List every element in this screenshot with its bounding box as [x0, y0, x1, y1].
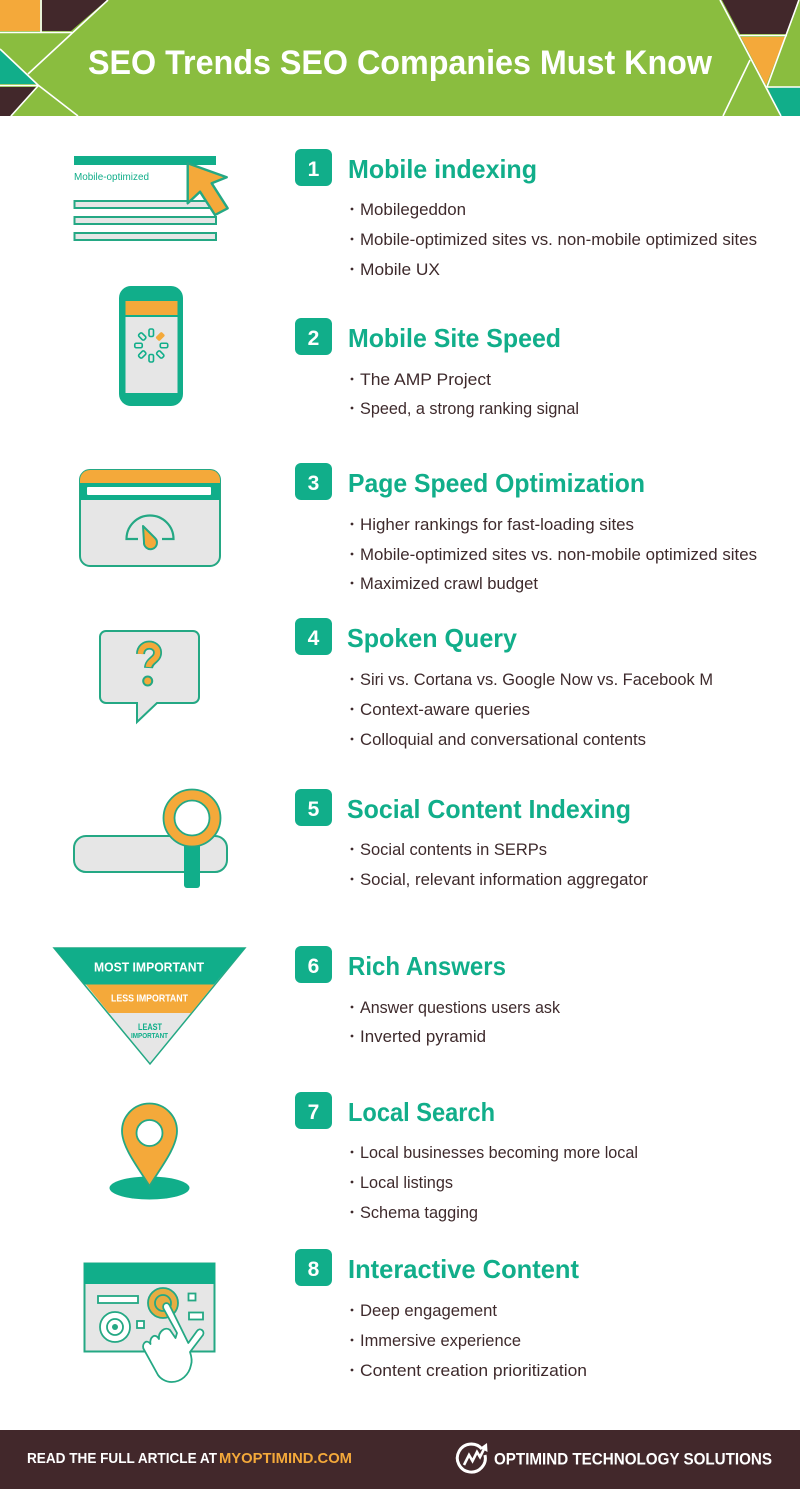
item 8: Interactive Content: Interactive Content: [348, 1254, 579, 1284]
item 8: Interactive Content: Content creation prioritization: [360, 1361, 587, 1380]
item 5: Social Content Indexing: Social contents in SERPs: [360, 840, 547, 859]
item 6: Rich Answers: [295, 946, 560, 1046]
item 7: Local Search: Local Search: [348, 1097, 495, 1127]
footer call to action: READ THE FULL ARTICLE AT: [27, 1450, 217, 1467]
item 6: Rich Answers: Inverted pyramid: [360, 1027, 486, 1046]
item 3: Page Speed Optimization: Mobile-optimized sites vs. non-mobile optimized sites: [360, 545, 757, 564]
footer link: MYOPTIMIND.COM: [219, 1450, 352, 1467]
icon: speech bubble with question mark: [100, 631, 199, 722]
icon: inverted pyramid: LESS IMPORTANT: [111, 994, 188, 1004]
icon: inverted pyramid: IMPORTANT: [131, 1033, 169, 1040]
item 4: Spoken Query: Siri vs. Cortana vs. Google Now vs. Facebook M: [360, 670, 713, 689]
icon: browser window with speed gauge: [80, 470, 220, 566]
item 8: Interactive Content: Deep engagement: [360, 1301, 497, 1320]
item 3: Page Speed Optimization: 3: [308, 472, 319, 495]
icon: location pin: [110, 1104, 190, 1200]
item 3: Page Speed Optimization: Maximized crawl budget: [360, 574, 538, 593]
item 7: Local Search: Schema tagging: [360, 1203, 478, 1222]
item 5: Social Content Indexing: [295, 789, 648, 889]
item 8: Interactive Content: [295, 1249, 587, 1380]
item 5: Social Content Indexing: Social, relevant information aggregator: [360, 870, 648, 889]
item 8: Interactive Content: 8: [308, 1258, 320, 1281]
icon: search bar with magnifying glass: [74, 790, 227, 888]
item 1: Mobile indexing: Mobilegeddon: [360, 200, 466, 219]
item 2: Mobile Site Speed: Mobile Site Speed: [348, 323, 561, 353]
item 6: Rich Answers: Rich Answers: [348, 951, 506, 981]
item 8: Interactive Content: Immersive experience: [360, 1331, 521, 1350]
item 3: Page Speed Optimization: Page Speed Optimization: [348, 468, 645, 498]
item 4: Spoken Query: [295, 618, 713, 749]
item 3: Page Speed Optimization: Higher rankings for fast-loading sites: [360, 515, 634, 534]
item 3: Page Speed Optimization: [295, 463, 757, 593]
item 1: Mobile indexing: Mobile indexing: [348, 154, 537, 184]
icon: interactive window with pointing hand: [84, 1263, 215, 1382]
item 2: Mobile Site Speed: The AMP Project: [360, 370, 491, 389]
icon: mobile-optimized search results with cursor: [74, 156, 228, 240]
icon: mobile-optimized search results with cursor: Mobile-optimized: [74, 171, 149, 183]
icon: phone with loading spinner: [119, 286, 183, 406]
icon: inverted pyramid: [54, 948, 245, 1064]
item 1: Mobile indexing: 1: [308, 158, 320, 181]
header banner: [0, 0, 800, 116]
item 7: Local Search: Local listings: [360, 1173, 453, 1192]
item 1: Mobile indexing: Mobile-optimized sites vs. non-mobile optimized sites: [360, 230, 757, 249]
title: SEO Trends SEO Companies Must Know: [88, 44, 713, 82]
item 6: Rich Answers: Answer questions users ask: [360, 998, 560, 1017]
item 1: Mobile indexing: [295, 149, 757, 279]
item 6: Rich Answers: 6: [308, 955, 319, 978]
item 4: Spoken Query: Colloquial and conversational contents: [360, 730, 646, 749]
item 2: Mobile Site Speed: [295, 318, 579, 418]
item 5: Social Content Indexing: Social Content Indexing: [347, 794, 631, 824]
item 7: Local Search: Local businesses becoming more local: [360, 1143, 638, 1162]
item 4: Spoken Query: Spoken Query: [347, 623, 518, 653]
icon: Optimind logo: [457, 1443, 488, 1472]
item 7: Local Search: [295, 1092, 638, 1222]
item 5: Social Content Indexing: 5: [308, 798, 320, 821]
item 1: Mobile indexing: Mobile UX: [360, 260, 440, 279]
footer bar: [0, 1430, 800, 1489]
icon: inverted pyramid: LEAST: [138, 1022, 162, 1032]
item 4: Spoken Query: Context-aware queries: [360, 700, 530, 719]
item 2: Mobile Site Speed: 2: [308, 327, 319, 350]
item 2: Mobile Site Speed: Speed, a strong ranking signal: [360, 399, 579, 418]
item 4: Spoken Query: 4: [308, 627, 320, 650]
company name: OPTIMIND TECHNOLOGY SOLUTIONS: [494, 1450, 772, 1468]
icon: inverted pyramid: MOST IMPORTANT: [94, 960, 204, 974]
item 7: Local Search: 7: [308, 1101, 319, 1124]
